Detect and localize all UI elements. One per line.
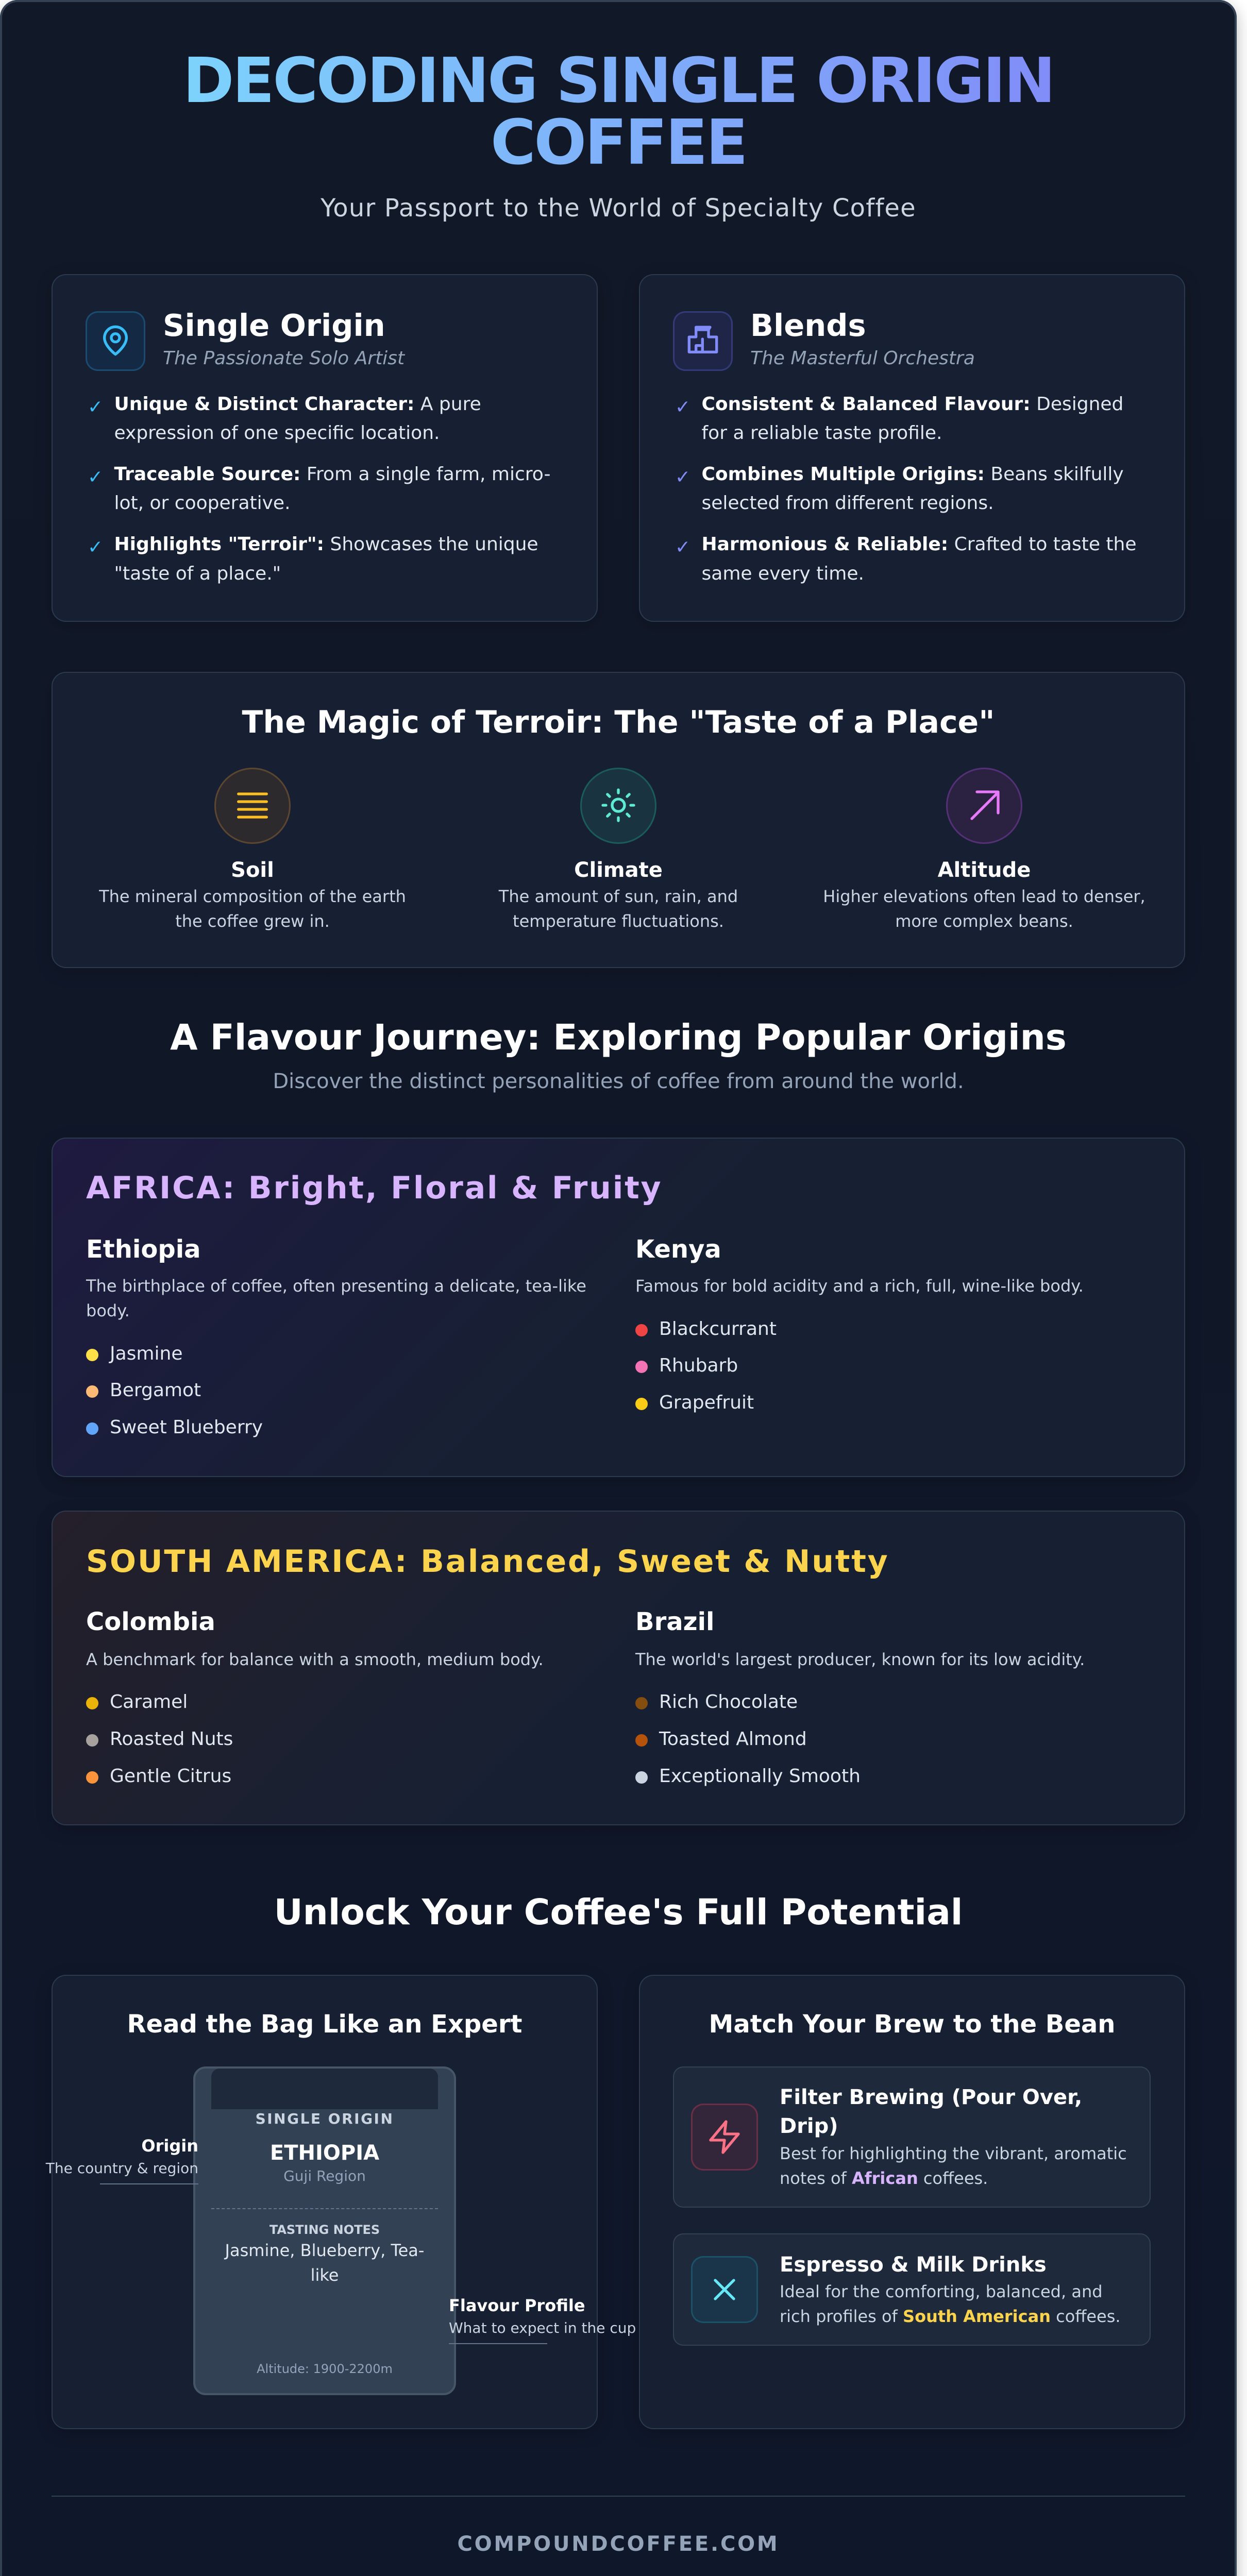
list item: terroir: "taste of a place." xyxy=(114,563,281,584)
description: ethiopia: The birthplace of coffee, often presenting a delicate, tea-like xyxy=(86,1276,586,1296)
note: caramel xyxy=(86,1691,395,1714)
description: climate: The amount of sun, rain, and xyxy=(499,887,738,906)
note: bergamot: Bergamot xyxy=(110,1380,201,1401)
note: blackcurrant: Blackcurrant xyxy=(659,1318,777,1340)
note: exceptionally smooth: Exceptionally Smooth xyxy=(659,1765,861,1787)
brew text: filter: Best for highlighting the vibrant, aromatic xyxy=(780,2144,1127,2163)
list item: harmonious xyxy=(675,534,1137,584)
callout: origin xyxy=(46,2136,198,2184)
coffee bag illustration xyxy=(193,2066,456,2395)
panel: read the bag xyxy=(52,1975,598,2429)
panel: match your brew xyxy=(639,1975,1185,2429)
callout text: flavour profile: What to expect in the cup xyxy=(449,2319,636,2336)
icon: blends xyxy=(673,311,733,371)
heading: south america: SOUTH AMERICA: Balanced, Sweet & Nutty xyxy=(86,1544,889,1580)
list item: multiple origins xyxy=(675,464,1124,514)
description: kenya: Famous for bold acidity and a rich, full, wine-like body. xyxy=(635,1276,1084,1296)
description: climate: temperature fluctuations. xyxy=(513,911,724,931)
name: brazil: Brazil xyxy=(635,1607,714,1636)
brew text: filter: notes of African coffees. xyxy=(780,2168,988,2188)
icon: lightning bolt xyxy=(691,2104,758,2171)
panel: blends xyxy=(639,274,1185,622)
description: soil: The mineral composition of the earth xyxy=(99,887,406,906)
brew text: filter xyxy=(780,2141,1127,2191)
name: colombia: Colombia xyxy=(86,1607,215,1636)
panel: south america xyxy=(52,1511,1185,1825)
name: kenya: Kenya xyxy=(635,1235,721,1264)
list item: terroir xyxy=(88,534,538,584)
label: altitude: Altitude xyxy=(938,858,1031,882)
list item: terroir: ✓ xyxy=(88,537,103,558)
list item: harmonious: same every time. xyxy=(702,563,864,584)
list item: unique character: ✓ xyxy=(88,397,103,418)
description: altitude xyxy=(823,887,1145,931)
column: soil xyxy=(99,768,406,931)
brew text: espresso: rich profiles of South American coffees. xyxy=(780,2306,1121,2326)
description: brazil: The world's largest producer, known for its low acidity. xyxy=(635,1650,1085,1669)
footer: COMPOUNDCOFFEE.COM xyxy=(457,2532,780,2556)
bag label: single origin: SINGLE ORIGIN xyxy=(256,2110,394,2127)
label: soil: Soil xyxy=(231,858,274,882)
list item: harmonious: Harmonious & Reliable: Crafted to taste the xyxy=(702,534,1137,555)
callout text: origin: The country & region xyxy=(46,2160,198,2177)
brew text: espresso xyxy=(780,2279,1121,2329)
list item: unique character: expression of one specific location. xyxy=(114,422,440,444)
list item: consistent flavour: Consistent & Balanced Flavour: Designed xyxy=(702,394,1123,415)
heading: single origin: Single Origin xyxy=(163,308,385,343)
note: rhubarb xyxy=(635,1354,945,1377)
heading: blends: Blends xyxy=(750,308,866,343)
heading: read the bag: Read the Bag Like an Expert xyxy=(127,2010,522,2039)
origin: brazil xyxy=(635,1607,1151,1792)
brew title: filter xyxy=(780,2083,1082,2141)
name: ethiopia: Ethiopia xyxy=(86,1235,201,1264)
bag label: ethiopia: ETHIOPIA xyxy=(270,2141,379,2165)
heading: match your brew: Match Your Brew to the Bean xyxy=(709,2010,1115,2039)
bag label: notes list: like xyxy=(311,2265,339,2285)
callout title: origin: Origin xyxy=(141,2136,198,2156)
note: grapefruit xyxy=(635,1392,945,1414)
title xyxy=(175,50,1061,174)
bag label: notes list: Jasmine, Blueberry, Tea- xyxy=(225,2241,424,2260)
description: ethiopia xyxy=(86,1276,586,1320)
brew title: filter: Filter Brewing (Pour Over, xyxy=(780,2086,1082,2109)
origin: colombia xyxy=(86,1607,601,1792)
list item: multiple origins: selected from different regions. xyxy=(702,493,994,514)
list item: terroir: Highlights "Terroir": Showcases the unique xyxy=(114,534,538,555)
description: ethiopia: body. xyxy=(86,1301,130,1320)
list item: harmonious: ✓ xyxy=(675,537,690,558)
description: soil: the coffee grew in. xyxy=(175,911,330,931)
icon: cross xyxy=(691,2256,758,2323)
note: rich chocolate: Rich Chocolate xyxy=(659,1691,798,1713)
note: gentle citrus: Gentle Citrus xyxy=(110,1765,231,1787)
description: colombia: A benchmark for balance with a smooth, medium body. xyxy=(86,1650,544,1669)
brew card: filter xyxy=(673,2066,1151,2208)
bag label: tasting notes: TASTING NOTES xyxy=(269,2223,380,2237)
note: jasmine: Jasmine xyxy=(110,1343,182,1364)
list item: consistent flavour: for a reliable taste profile. xyxy=(702,422,942,444)
tagline: solo artist: The Passionate Solo Artist xyxy=(163,348,405,369)
note: roasted nuts: Roasted Nuts xyxy=(110,1728,233,1750)
title: COFFEE xyxy=(491,107,746,179)
bag label: altitude: Altitude: 1900-2200m xyxy=(257,2362,393,2376)
note: toasted almond: Toasted Almond xyxy=(659,1728,807,1750)
bag label: notes list xyxy=(195,2238,454,2287)
origin: ethiopia xyxy=(86,1235,586,1437)
list item: consistent flavour xyxy=(675,394,1123,444)
description: climate xyxy=(499,887,738,931)
label: climate: Climate xyxy=(574,858,663,882)
icon: map pin xyxy=(86,311,145,371)
brew title: espresso: Espresso & Milk Drinks xyxy=(780,2253,1047,2277)
note: rhubarb: Rhubarb xyxy=(659,1355,738,1376)
brew title: filter: Drip) xyxy=(780,2114,838,2138)
icon: sun xyxy=(580,768,656,844)
note: blackcurrant xyxy=(635,1318,945,1341)
note: sweet blueberry: Sweet Blueberry xyxy=(110,1417,263,1437)
section heading: unlock potential: Unlock Your Coffee's Full Potential xyxy=(274,1892,963,1933)
column: climate xyxy=(499,768,738,931)
list item: unique character xyxy=(88,394,481,444)
bag top flap xyxy=(211,2069,438,2109)
description: soil xyxy=(99,887,406,931)
icon: arrow up right xyxy=(946,768,1022,844)
section heading: flavour journey: A Flavour Journey: Exploring Popular Origins xyxy=(170,1017,1067,1058)
brew card: espresso xyxy=(673,2233,1151,2346)
icon: soil lines xyxy=(214,768,291,844)
list item: unique character: Unique & Distinct Character: A pure xyxy=(114,394,481,415)
panel: single origin xyxy=(52,274,598,622)
list item: consistent flavour: ✓ xyxy=(675,397,690,418)
column: altitude xyxy=(823,768,1145,931)
note: exceptionally smooth xyxy=(635,1765,945,1788)
list item: traceable source: Traceable Source: From a single farm, micro- xyxy=(114,464,550,485)
description: altitude: Higher elevations often lead to denser, xyxy=(823,887,1145,906)
title: DECODING SINGLE ORIGIN xyxy=(183,45,1054,117)
panel: africa xyxy=(52,1138,1185,1477)
panel: terroir xyxy=(52,672,1185,968)
section subheading: Discover the distinct personalities of coffee from around the world. xyxy=(273,1070,964,1093)
list item: multiple origins: Combines Multiple Origins: Beans skilfully xyxy=(702,464,1124,485)
origin: kenya xyxy=(635,1234,1151,1420)
note: caramel: Caramel xyxy=(110,1691,188,1713)
note: rich chocolate xyxy=(635,1691,945,1714)
heading: terroir: The Magic of Terroir: The "Taste of a Place" xyxy=(242,704,995,740)
note: grapefruit: Grapefruit xyxy=(659,1392,754,1413)
heading: africa: AFRICA: Bright, Floral & Fruity xyxy=(86,1170,662,1206)
list item: traceable source: ✓ xyxy=(88,467,103,488)
bag label: guji region: Guji Region xyxy=(283,2167,366,2184)
note: gentle citrus xyxy=(86,1765,395,1788)
brew text: espresso: Ideal for the comforting, balanced, and xyxy=(780,2281,1103,2301)
list item: multiple origins: ✓ xyxy=(675,467,690,488)
callout title: flavour profile: Flavour Profile xyxy=(449,2296,585,2315)
list item: traceable source: lot, or cooperative. xyxy=(114,493,291,514)
callout: flavour profile xyxy=(449,2295,635,2344)
description: altitude: more complex beans. xyxy=(895,911,1073,931)
subtitle: Your Passport to the World of Specialty Coffee xyxy=(321,194,916,223)
note: toasted almond xyxy=(635,1728,945,1751)
tagline: orchestra: The Masterful Orchestra xyxy=(750,348,975,369)
list item: traceable source xyxy=(88,464,550,514)
note: roasted nuts xyxy=(86,1728,395,1751)
